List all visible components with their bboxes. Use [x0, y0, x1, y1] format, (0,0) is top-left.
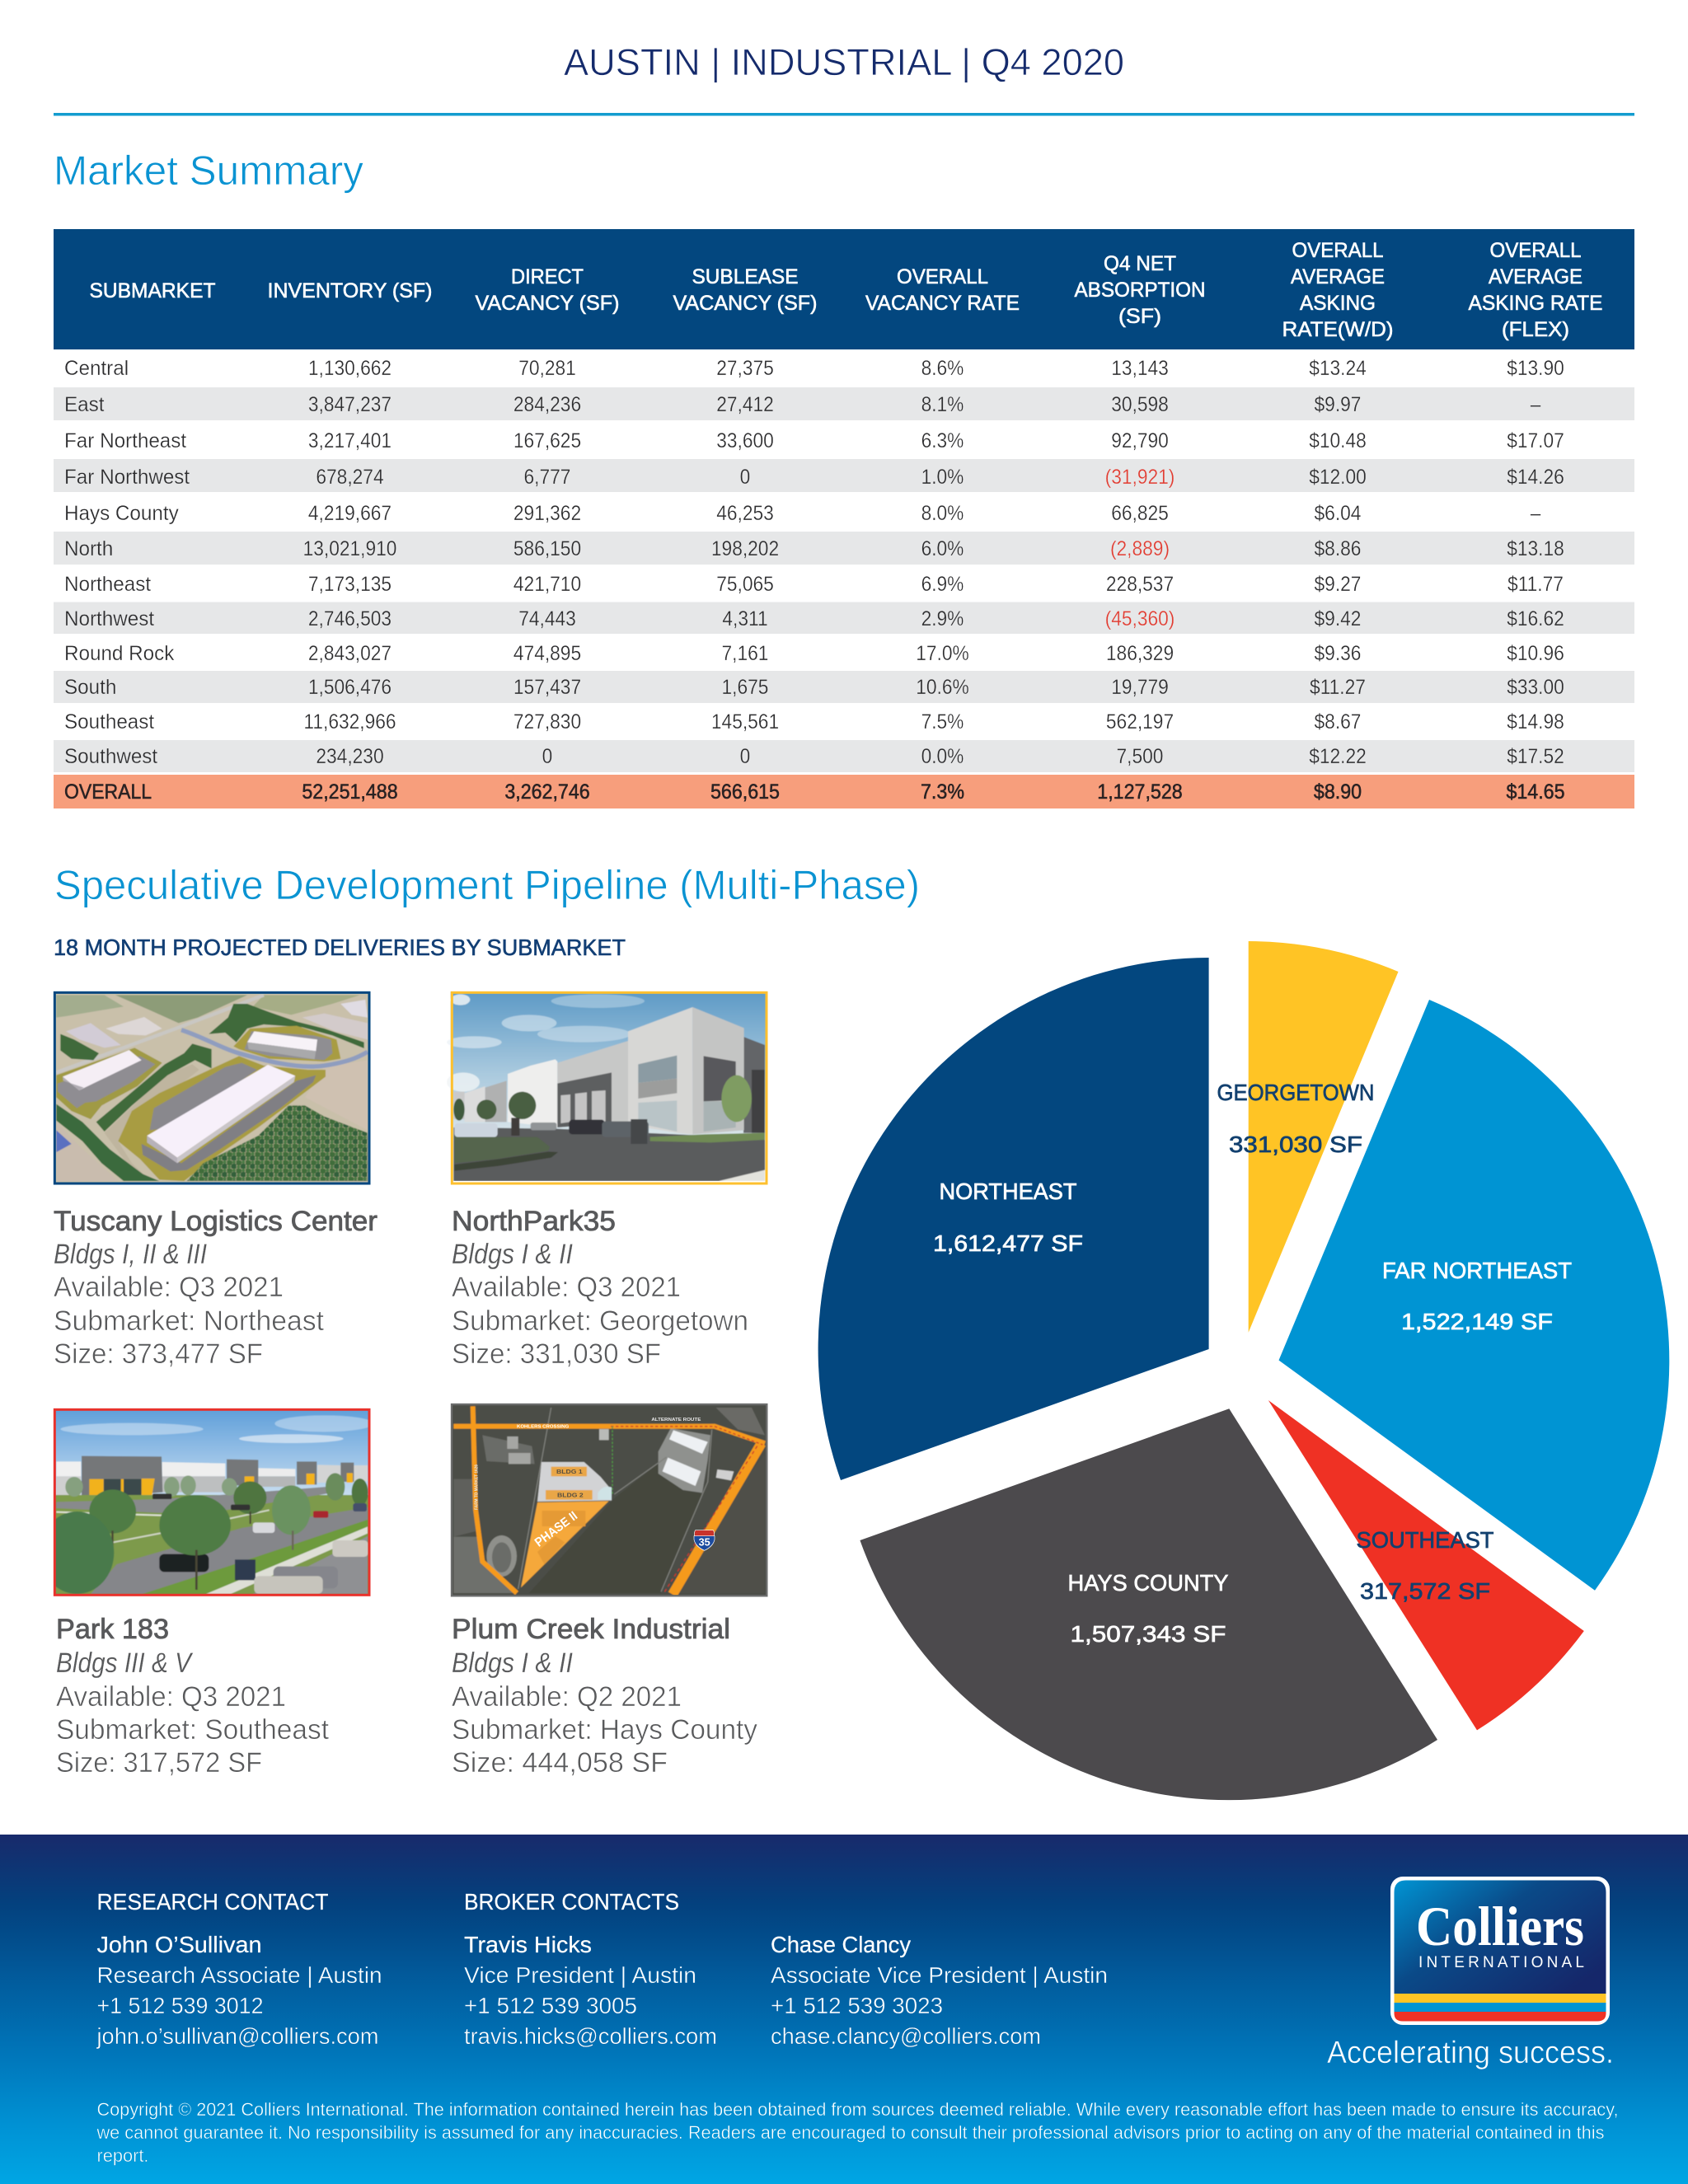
slice: Georgetown: GEORGETOWN — [1217, 1080, 1375, 1105]
icon: interstate 35 shield: 35 — [699, 1536, 710, 1548]
project details: Submarket: Hays County — [452, 1714, 757, 1746]
row: Southwest: 0.0% — [921, 745, 964, 768]
row: Southeast: 7.5% — [921, 710, 964, 733]
broker contact: Travis Hicks: travis.hicks@colliers.com — [464, 2023, 717, 2049]
row: Central: $13.24 — [1309, 357, 1367, 380]
table header row: RATE(W/D) — [1282, 318, 1393, 341]
row: East: 3,847,237 — [308, 393, 392, 416]
broker contact: Chase Clancy: Associate Vice President | Austin — [771, 1962, 1108, 1988]
broker contact: Chase Clancy: chase.clancy@colliers.com — [771, 2023, 1041, 2049]
row: Round Rock: 474,895 — [513, 642, 581, 665]
row: East: 284,236 — [513, 393, 581, 416]
slice: Far Northeast: 1,522,149 SF — [1401, 1309, 1553, 1334]
row: North: 586,150 — [513, 537, 581, 560]
photo: Plum Creek site aerial map: PHASE II — [532, 1509, 580, 1550]
slice: Northeast: NORTHEAST — [940, 1179, 1076, 1204]
row: South: South — [64, 677, 116, 699]
project details: Available: Q3 2021 — [54, 1272, 284, 1303]
row: Hays County: $6.04 — [1315, 502, 1361, 525]
row: Hays County: 66,825 — [1111, 502, 1169, 525]
slice: Far Northeast — [1279, 1000, 1669, 1591]
project details — [54, 1206, 377, 1370]
row: Southwest: $17.52 — [1507, 745, 1564, 768]
row: Far Northeast — [64, 429, 1564, 452]
row: Southwest: Southwest — [64, 746, 157, 768]
table header row: OVERALL — [897, 265, 988, 288]
row: Far Northwest: Far Northwest — [64, 466, 190, 489]
row: South: 10.6% — [916, 676, 969, 699]
row: Northwest: 74,443 — [518, 607, 576, 630]
project details: Available: Q2 2021 — [452, 1681, 682, 1713]
research contact: +1 512 539 3012 — [97, 1993, 264, 2018]
row: Far Northwest: 6,777 — [524, 466, 570, 489]
row: Southeast: $8.67 — [1315, 710, 1361, 733]
project card: Park 183 — [40, 1408, 373, 1779]
icon: interstate 35 shield — [694, 1530, 715, 1550]
project details: Submarket: Northeast — [54, 1305, 325, 1337]
row: Overall: 566,615 — [710, 780, 780, 804]
photo: Plum Creek site aerial map: ALTERNATE ROUTE — [651, 1418, 701, 1422]
project details — [452, 1206, 748, 1370]
row: Southwest: 7,500 — [1117, 745, 1163, 768]
research contact: john.o’sullivan@colliers.com — [96, 2023, 379, 2049]
logo: Colliers International — [1390, 1877, 1610, 2025]
row: Northwest: 2,746,503 — [308, 607, 392, 630]
row: South: $11.27 — [1310, 676, 1366, 699]
photo: Plum Creek site aerial map: BLDG 2 — [557, 1492, 584, 1499]
broker contact: Chase Clancy — [771, 1932, 1108, 2049]
row: Northwest: $16.62 — [1507, 607, 1564, 630]
row: Northeast: Northeast — [64, 574, 151, 596]
row: South: 157,437 — [513, 676, 581, 699]
row: Overall: 52,251,488 — [302, 780, 398, 804]
row: Southwest: $12.22 — [1309, 745, 1367, 768]
row: Overall: $14.65 — [1506, 780, 1565, 804]
row: Round Rock: Round Rock — [64, 643, 175, 665]
table header row: ABSORPTION — [1075, 279, 1205, 302]
heading: market summary: Market Summary — [54, 148, 363, 194]
row: North: $13.18 — [1507, 537, 1564, 560]
broker contact: Chase Clancy: Chase Clancy — [771, 1932, 911, 1957]
footer panel — [0, 1835, 1688, 2184]
row: Overall: 1,127,528 — [1097, 780, 1183, 804]
row: Northwest: 2.9% — [921, 607, 964, 630]
project details: Available: Q3 2021 — [56, 1681, 286, 1713]
slice: Hays County — [860, 1408, 1437, 1800]
row: Central: 27,375 — [716, 357, 774, 380]
row: Overall: OVERALL — [64, 780, 152, 804]
row: Overall — [54, 775, 1634, 808]
project details: Plum Creek Industrial — [452, 1614, 730, 1645]
row: Round Rock: 2,843,027 — [308, 642, 392, 665]
project card: NorthPark35 — [447, 991, 767, 1370]
row: Far Northwest: $12.00 — [1309, 466, 1367, 489]
copyright notice: Copyright © 2021 Colliers International. The information contained herein has been obtained from sources deemed reliable. While every reasonable effort has been made to ensure its accuracy, — [97, 2099, 1619, 2120]
project details: Submarket: Georgetown — [452, 1305, 748, 1337]
slice: Far Northeast: FAR NORTHEAST — [1382, 1258, 1572, 1283]
logo: Colliers International: INTERNATIONAL — [1418, 1954, 1584, 1971]
row: South: $33.00 — [1507, 676, 1564, 699]
photo: Plum Creek site aerial map: BLDG 1 — [556, 1468, 584, 1475]
table header row: INVENTORY (SF) — [267, 279, 432, 302]
row: East: $9.97 — [1315, 393, 1361, 416]
photo: Plum Creek site aerial map: FARM TO MARKET 1626 — [475, 1465, 480, 1510]
slice: Georgetown: 331,030 SF — [1229, 1132, 1362, 1157]
row: Far Northeast: 167,625 — [513, 429, 581, 452]
row: Central: 70,281 — [518, 357, 576, 380]
row: Far Northeast: Far Northeast — [64, 430, 186, 452]
row: East: East — [64, 394, 105, 416]
research contact: John O’Sullivan — [97, 1932, 262, 1957]
project details: Submarket: Southeast — [56, 1714, 330, 1746]
project card: Tuscany Logistics Center — [54, 991, 377, 1370]
row: Round Rock: $10.96 — [1507, 642, 1564, 665]
heading: speculative development pipeline: Speculative Development Pipeline (Multi-Phase) — [54, 862, 920, 908]
row: South: 1,506,476 — [308, 676, 392, 699]
row: Far Northeast: 92,790 — [1111, 429, 1169, 452]
copyright notice: report. — [97, 2145, 148, 2166]
row: Central: 13,143 — [1111, 357, 1169, 380]
project details: Size: 373,477 SF — [54, 1338, 263, 1370]
photo: Plum Creek site aerial map — [450, 1403, 768, 1597]
project details — [56, 1614, 330, 1779]
table header row: ASKING — [1300, 292, 1376, 315]
row: Southwest: 0 — [542, 745, 552, 768]
row: Southeast — [64, 710, 1564, 733]
row: Northwest: Northwest — [64, 608, 154, 630]
research contact: Research Associate | Austin — [97, 1962, 382, 1988]
copyright notice — [96, 2099, 1619, 2166]
row: East: – — [1531, 393, 1541, 416]
row: Hays County — [64, 502, 1541, 525]
project details: Size: 317,572 SF — [56, 1747, 262, 1779]
row: North: 198,202 — [711, 537, 779, 560]
broker contact: Travis Hicks — [464, 1889, 717, 2049]
row: Hays County: 8.0% — [921, 502, 964, 525]
row: Hays County: 291,362 — [513, 502, 581, 525]
row: Far Northeast: 6.3% — [921, 429, 964, 452]
logo: Colliers International: Colliers — [1416, 1895, 1584, 1957]
broker contact: Travis Hicks: BROKER CONTACTS — [464, 1889, 679, 1915]
row: East: 30,598 — [1111, 393, 1169, 416]
row: Northwest: (45,360) — [1105, 607, 1175, 630]
row: Hays County: 4,219,667 — [308, 502, 392, 525]
row: Far Northeast: 3,217,401 — [308, 429, 392, 452]
project details: Size: 444,058 SF — [452, 1747, 668, 1779]
row: Northeast — [64, 573, 1564, 596]
project details: Bldgs I & II — [452, 1647, 573, 1679]
row: Far Northwest: 0 — [740, 466, 750, 489]
row: North — [54, 532, 1634, 565]
photo: aerial rendering of Tuscany Logistics Center — [53, 991, 371, 1185]
row: Round Rock: 186,329 — [1106, 642, 1174, 665]
photo: NorthPark35 building rendering — [447, 991, 768, 1185]
table header row: ASKING RATE — [1469, 292, 1602, 315]
row: Northeast: 75,065 — [716, 573, 774, 596]
row: North: $8.86 — [1315, 537, 1361, 560]
row: Central: $13.90 — [1507, 357, 1564, 380]
row: Southeast: Southeast — [64, 711, 154, 733]
row: Northwest: 4,311 — [722, 607, 768, 630]
row: Northwest — [54, 602, 1634, 634]
row: South: 19,779 — [1111, 676, 1169, 699]
slice: Hays County: HAYS COUNTY — [1068, 1570, 1229, 1596]
row: Far Northwest: 1.0% — [921, 466, 964, 489]
row: Southwest — [54, 740, 1634, 772]
photo: Park 183 rendering — [53, 1408, 371, 1596]
slice: Southeast: SOUTHEAST — [1357, 1527, 1493, 1553]
row: Overall: 3,262,746 — [504, 780, 590, 804]
row: Far Northeast: $10.48 — [1309, 429, 1367, 452]
row: East: 27,412 — [716, 393, 774, 416]
row: Overall: 7.3% — [921, 780, 964, 804]
table header row: SUBLEASE — [692, 265, 798, 288]
project details — [452, 1614, 757, 1779]
row: Southwest: 0 — [740, 745, 750, 768]
row: Southeast: 727,830 — [513, 710, 581, 733]
table: market summary — [54, 229, 1634, 808]
project details: Park 183 — [56, 1614, 169, 1645]
project details: Available: Q3 2021 — [452, 1272, 681, 1303]
project details: Tuscany Logistics Center — [54, 1206, 377, 1237]
row: Southeast: 145,561 — [711, 710, 779, 733]
project details: Bldgs III & V — [56, 1647, 194, 1679]
project details: NorthPark35 — [452, 1206, 616, 1237]
tagline: Accelerating success. — [1327, 2036, 1614, 2070]
row: South — [54, 671, 1634, 703]
table header row: (SF) — [1118, 305, 1161, 328]
table header row: (FLEX) — [1502, 318, 1569, 341]
row: Round Rock — [64, 642, 1564, 665]
row: Southwest: 234,230 — [316, 745, 384, 768]
slice: Hays County: 1,507,343 SF — [1070, 1621, 1226, 1647]
row: Round Rock: 7,161 — [722, 642, 768, 665]
project details: Bldgs I, II & III — [54, 1239, 207, 1270]
row: North: 13,021,910 — [303, 537, 396, 560]
row: Southeast: $14.98 — [1507, 710, 1564, 733]
row: Northeast: 421,710 — [513, 573, 581, 596]
row: North: North — [64, 538, 113, 560]
slice: Northeast: 1,612,477 SF — [933, 1230, 1083, 1256]
row: Southeast: 562,197 — [1106, 710, 1174, 733]
row: Northeast: $9.27 — [1315, 573, 1361, 596]
row: Hays County: – — [1531, 502, 1541, 525]
row: North: 6.0% — [921, 537, 964, 560]
row: East: 8.1% — [921, 393, 964, 416]
research contact — [96, 1889, 382, 2049]
copyright notice: we cannot guarantee it. No responsibility is assumed for any inaccuracies. Readers are encouraged to consult their professional advisors prior to acting on any of the material contained in this — [96, 2122, 1605, 2143]
row: Hays County: 46,253 — [716, 502, 774, 525]
row: East — [54, 387, 1634, 420]
project details: Size: 331,030 SF — [452, 1338, 661, 1370]
row: Far Northwest: $14.26 — [1507, 466, 1564, 489]
subheading: projected deliveries: 18 MONTH PROJECTED DELIVERIES BY SUBMARKET — [54, 935, 626, 960]
row: Round Rock: $9.36 — [1315, 642, 1361, 665]
row: Far Northeast: $17.07 — [1507, 429, 1564, 452]
table header row: AVERAGE — [1489, 265, 1582, 288]
row: Central: 8.6% — [921, 357, 964, 380]
slice: Southeast — [1268, 1400, 1584, 1730]
broker contact: Travis Hicks: Vice President | Austin — [464, 1962, 696, 1988]
slice: Northeast — [818, 958, 1209, 1480]
table header row: Q4 NET — [1104, 252, 1176, 275]
table header row: VACANCY (SF) — [673, 292, 818, 315]
pie chart: deliveries by submarket — [818, 941, 1669, 1800]
project card: Plum Creek Industrial — [451, 1404, 767, 1779]
slice: Georgetown — [1217, 941, 1398, 1333]
table header row — [54, 229, 1634, 349]
row: Round Rock: 17.0% — [916, 642, 969, 665]
row: Central: Central — [64, 358, 129, 380]
broker contact: Travis Hicks: Travis Hicks — [464, 1932, 592, 1957]
table header row: SUBMARKET — [89, 279, 216, 302]
row: Far Northwest: (31,921) — [1105, 466, 1175, 489]
row: Southeast: 11,632,966 — [303, 710, 396, 733]
table header row: VACANCY (SF) — [475, 292, 620, 315]
photo: Plum Creek site aerial map: KOHLERS CROSSING — [517, 1425, 569, 1430]
row: Central — [64, 357, 1564, 380]
row: Far Northwest: 678,274 — [316, 466, 384, 489]
broker contact: Travis Hicks: +1 512 539 3005 — [464, 1993, 637, 2018]
row: Northeast: $11.77 — [1507, 573, 1564, 596]
broker contact: Chase Clancy: +1 512 539 3023 — [771, 1993, 943, 2018]
row: Northeast: 228,537 — [1106, 573, 1174, 596]
row: Northwest: $9.42 — [1315, 607, 1361, 630]
table header row: AVERAGE — [1291, 265, 1385, 288]
row: Northeast: 7,173,135 — [308, 573, 392, 596]
row: Overall: $8.90 — [1314, 780, 1362, 804]
row: Far Northeast: 33,600 — [716, 429, 774, 452]
row: Hays County: Hays County — [64, 503, 179, 525]
table header row: DIRECT — [511, 265, 584, 288]
table header row: OVERALL — [1490, 239, 1582, 262]
row: Northeast: 6.9% — [921, 573, 964, 596]
row: Far Northwest — [54, 459, 1634, 492]
title: AUSTIN | INDUSTRIAL | Q4 2020 — [564, 41, 1124, 83]
row: South: 1,675 — [722, 676, 768, 699]
row: North: (2,889) — [1110, 537, 1170, 560]
research contact: RESEARCH CONTACT — [97, 1889, 328, 1915]
slice: Southeast: 317,572 SF — [1360, 1578, 1490, 1604]
row: Central: 1,130,662 — [308, 357, 392, 380]
table header row: OVERALL — [1292, 239, 1384, 262]
table header row: VACANCY RATE — [865, 292, 1020, 315]
project details: Bldgs I & II — [452, 1239, 573, 1270]
